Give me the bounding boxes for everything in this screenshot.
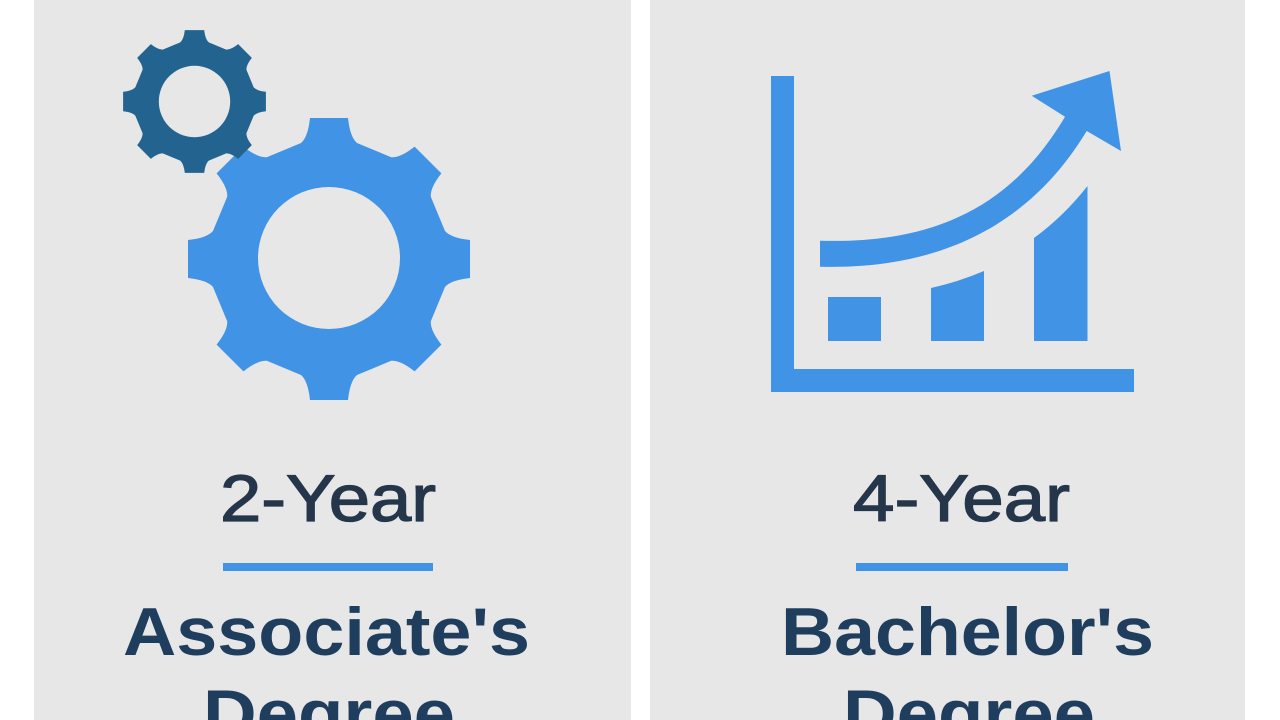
bar: tall bbox=[1034, 186, 1088, 341]
arrow: rising curve bbox=[820, 71, 1121, 267]
heading: Bachelor's Degree bbox=[781, 594, 1154, 720]
icon: growth chart with arrow bbox=[771, 71, 1134, 392]
bar: medium bbox=[931, 271, 984, 341]
bar: small bbox=[828, 297, 881, 341]
divider: bachelor bbox=[856, 563, 1068, 571]
heading: Associate's Degree: Associate's bbox=[123, 594, 530, 670]
icon: small dark gear bbox=[123, 30, 266, 173]
heading: 4-Year: 4-Year bbox=[853, 461, 1070, 535]
panel: associate's degree bbox=[34, 0, 631, 720]
panel: bachelor's degree bbox=[650, 0, 1245, 720]
heading: Associate's Degree bbox=[123, 594, 530, 720]
icon: large blue gear bbox=[188, 118, 470, 400]
chart axes bbox=[771, 76, 1134, 392]
heading: 2-Year: 2-Year bbox=[220, 461, 436, 535]
icon: two gears bbox=[123, 30, 470, 400]
divider: associate bbox=[223, 563, 433, 571]
heading: Bachelor's Degree: Bachelor's bbox=[781, 594, 1154, 670]
